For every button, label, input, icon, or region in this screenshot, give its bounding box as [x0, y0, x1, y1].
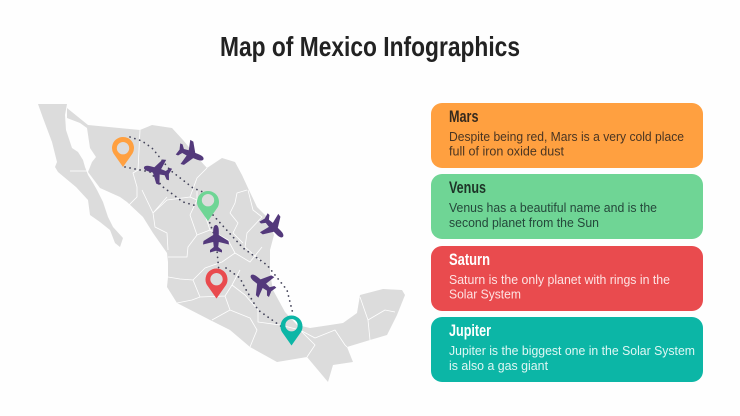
icon: airplane 5 — [243, 265, 281, 303]
icon: orange map pin — [112, 137, 134, 167]
Venus text: second planet from the Sun — [449, 216, 599, 230]
Mars text: full of iron oxide dust — [449, 144, 565, 158]
map: state borders — [70, 130, 395, 357]
Jupiter heading: Jupiter — [449, 321, 491, 340]
title: Map of Mexico Infographics — [220, 31, 520, 62]
Saturn heading: Saturn — [449, 250, 490, 269]
icon: airplane 4 — [254, 208, 292, 246]
icon: green map pin — [197, 191, 219, 221]
dotted flight routes — [125, 137, 293, 327]
Jupiter text: Jupiter is the biggest one in the Solar System — [449, 344, 695, 358]
panel: Venus — [431, 174, 703, 239]
Saturn text: Solar System — [449, 288, 521, 302]
panel: Saturn — [431, 246, 703, 311]
Saturn text: Saturn is the only planet with rings in the — [449, 273, 670, 287]
Venus text: Venus has a beautiful name and is the — [449, 201, 657, 215]
map of Mexico — [38, 104, 405, 382]
Jupiter text: is also a gas giant — [449, 359, 549, 373]
map: mainland — [67, 108, 405, 382]
icon: airplane 1 — [173, 137, 208, 171]
panel: Jupiter — [431, 317, 703, 382]
Mars text: Despite being red, Mars is a very cold place — [449, 130, 684, 144]
panel: Mars — [431, 103, 703, 168]
icon: airplane 2 — [141, 155, 174, 187]
icon: airplane 3 — [203, 225, 229, 252]
Mars heading: Mars — [449, 107, 478, 126]
map: Baja California peninsula — [38, 104, 123, 247]
icon: teal map pin — [280, 315, 302, 346]
icon: red map pin — [206, 268, 228, 298]
Venus heading: Venus — [449, 178, 486, 197]
